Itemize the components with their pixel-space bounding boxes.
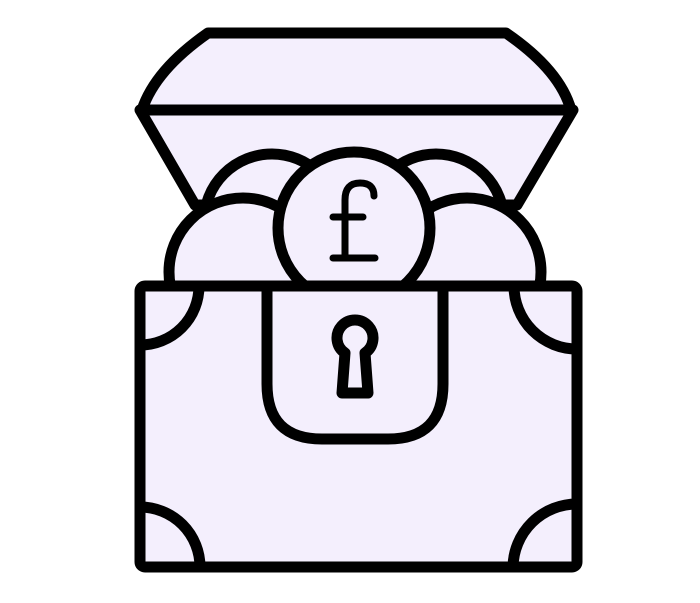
lock plate — [267, 286, 443, 439]
lid — [140, 33, 573, 205]
pound symbol — [333, 183, 375, 258]
chest box — [140, 286, 577, 567]
coins — [169, 152, 541, 346]
